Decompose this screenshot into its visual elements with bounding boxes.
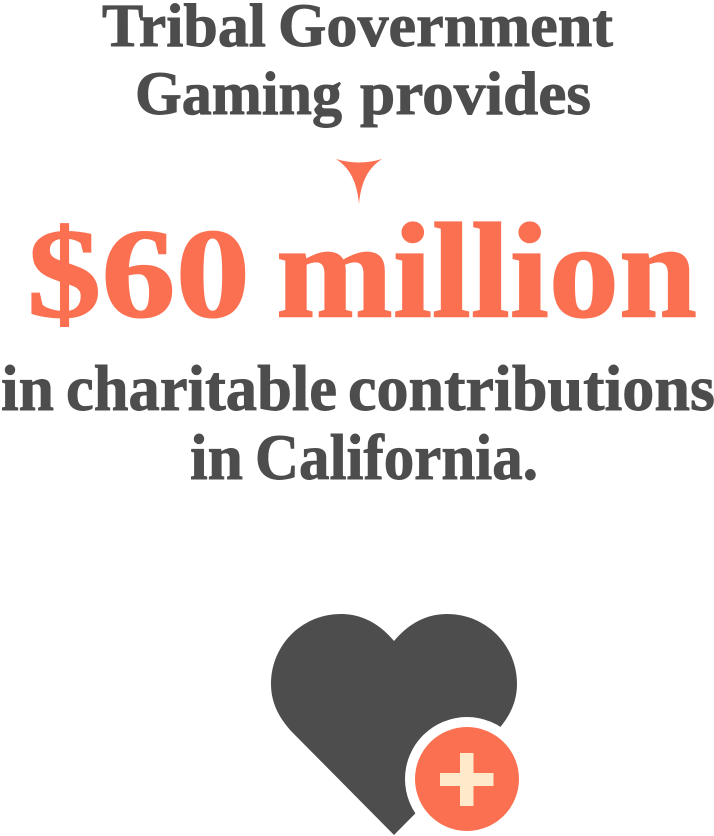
text block: in charitable contributions in California.: charitable — [66, 353, 337, 425]
text block: in charitable contributions in California.: California. — [255, 422, 538, 494]
heading: Tribal Government Gaming provides — [102, 0, 614, 128]
text block: in charitable contributions in California.: contributions — [348, 353, 714, 425]
heading: Tribal Government Gaming provides: provides — [360, 61, 591, 128]
text block: in charitable contributions in California.: in — [190, 422, 243, 494]
headline figure: $60 million: million — [276, 196, 697, 346]
plus sign — [440, 753, 494, 806]
heart — [271, 614, 517, 835]
heading: Tribal Government Gaming provides: Gaming — [135, 61, 342, 128]
headline figure: $60 million: $60 — [27, 202, 250, 344]
text block: in charitable contributions in California. — [1, 353, 714, 494]
icon: heart with plus — [271, 614, 529, 836]
coral circle — [415, 727, 519, 831]
headline figure: $60 million — [27, 196, 697, 346]
white ring — [405, 717, 529, 836]
text block: in charitable contributions in California.: in — [1, 353, 54, 425]
icon: pointer arrow — [336, 159, 382, 204]
